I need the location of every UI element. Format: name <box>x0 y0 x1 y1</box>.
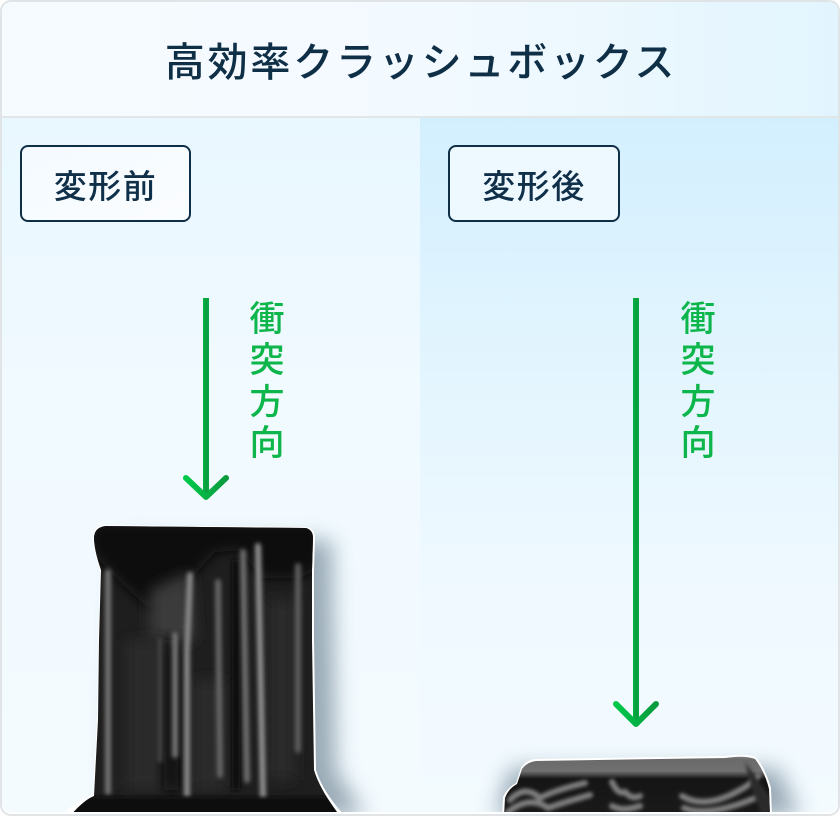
label: impact direction before: 向 <box>249 424 285 463</box>
crash box top cap shading <box>94 526 313 608</box>
label: impact direction after <box>680 300 716 463</box>
label: impact direction before: 方 <box>249 383 285 422</box>
panel: before deformation <box>2 118 420 816</box>
crash box ribs <box>108 546 298 798</box>
arrow: impact direction before <box>186 298 226 497</box>
label: impact direction after: 方 <box>680 383 716 422</box>
crushed folds <box>508 776 760 812</box>
arrow: impact direction after <box>616 298 656 724</box>
label: impact direction before <box>249 300 285 463</box>
label: before deformation <box>21 146 190 221</box>
crash box before deformation <box>60 520 365 816</box>
label: impact direction before: 衝 <box>249 300 285 339</box>
label: before deformation: 変形前 <box>54 168 157 205</box>
header band <box>2 2 838 118</box>
label: impact direction after: 突 <box>680 341 716 380</box>
label: after deformation: 変形後 <box>482 168 586 205</box>
label: impact direction after: 向 <box>680 424 716 463</box>
label: impact direction before: 突 <box>249 341 285 380</box>
title: 高効率クラッシュボックス <box>165 41 677 85</box>
label: after deformation <box>449 146 619 221</box>
panel: after deformation <box>420 118 838 816</box>
label: impact direction after: 衝 <box>680 300 716 339</box>
crash box after deformation <box>495 752 800 816</box>
